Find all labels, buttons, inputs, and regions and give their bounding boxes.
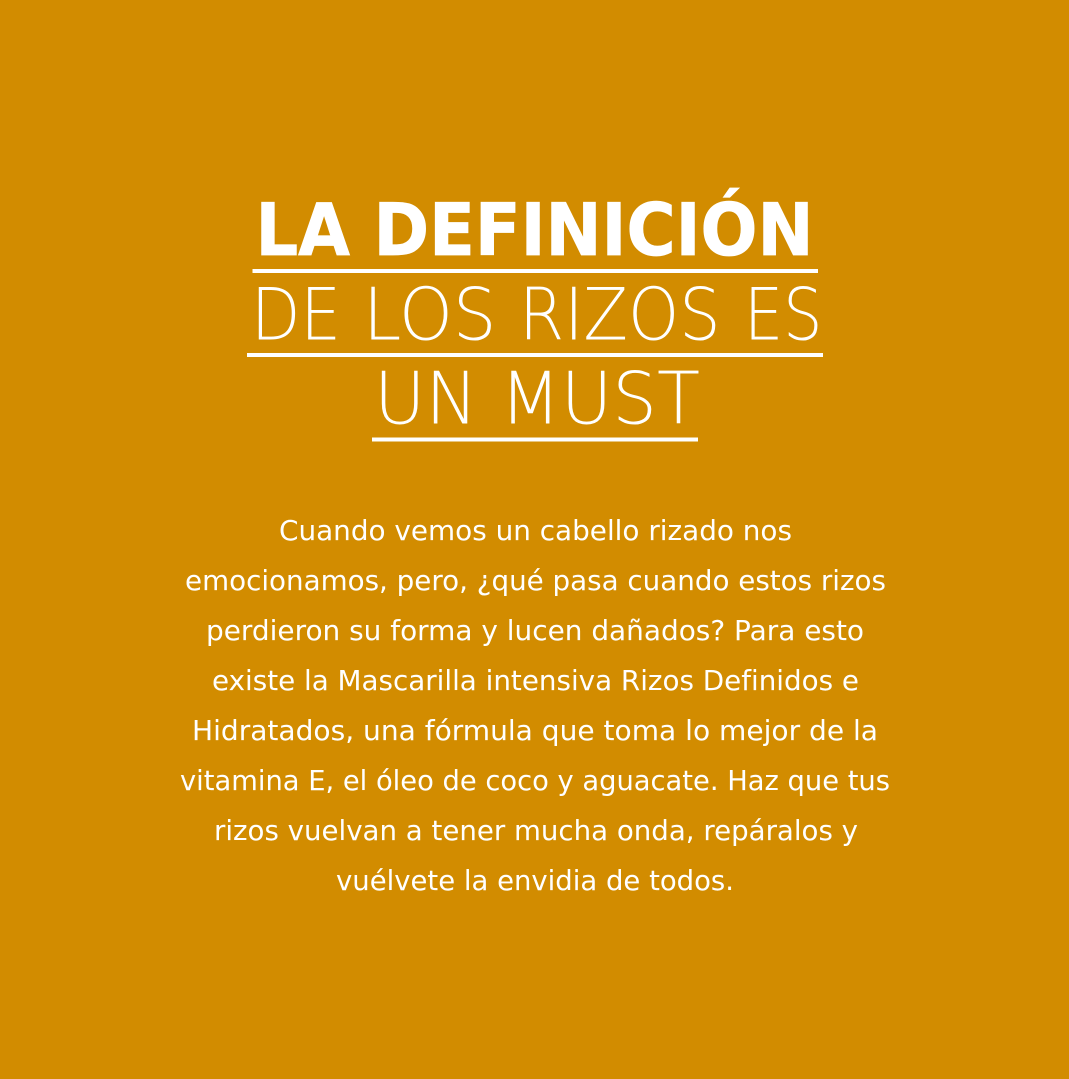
title line: un must: MUST bbox=[500, 356, 700, 440]
body paragraph: rizos vuelvan a tener mucha onda, repáralos y bbox=[214, 814, 858, 847]
underline three bbox=[372, 438, 698, 442]
body paragraph: Hidratados, una fórmula que toma lo mejor de la bbox=[192, 714, 878, 747]
body paragraph: vitamina E, el óleo de coco y aguacate. Haz que tus bbox=[180, 764, 890, 797]
body paragraph: perdieron su forma y lucen dañados? Para esto bbox=[206, 614, 864, 647]
body paragraph bbox=[180, 514, 890, 897]
underline one bbox=[252, 269, 818, 273]
title line: un must: UN bbox=[374, 356, 478, 440]
body paragraph: existe la Mascarilla intensiva Rizos Definidos e bbox=[212, 664, 859, 697]
title line: de los rizos es: LOS bbox=[363, 272, 496, 356]
body paragraph: Cuando vemos un cabello rizado nos bbox=[279, 514, 792, 547]
title line: de los rizos es bbox=[251, 272, 822, 356]
title line: de los rizos es: RIZOS bbox=[519, 272, 720, 356]
title bbox=[247, 188, 823, 442]
body paragraph: vuélvete la envidia de todos. bbox=[336, 864, 734, 897]
underline two bbox=[247, 353, 823, 357]
title line: un must bbox=[374, 356, 700, 440]
title line: de los rizos es: ES bbox=[744, 272, 822, 356]
body paragraph: emocionamos, pero, ¿qué pasa cuando estos rizos bbox=[185, 564, 886, 597]
title line: la definición: LA bbox=[256, 188, 350, 272]
title line: de los rizos es: DE bbox=[251, 272, 341, 356]
title line: la definición: DEFINICIÓN bbox=[374, 188, 814, 272]
